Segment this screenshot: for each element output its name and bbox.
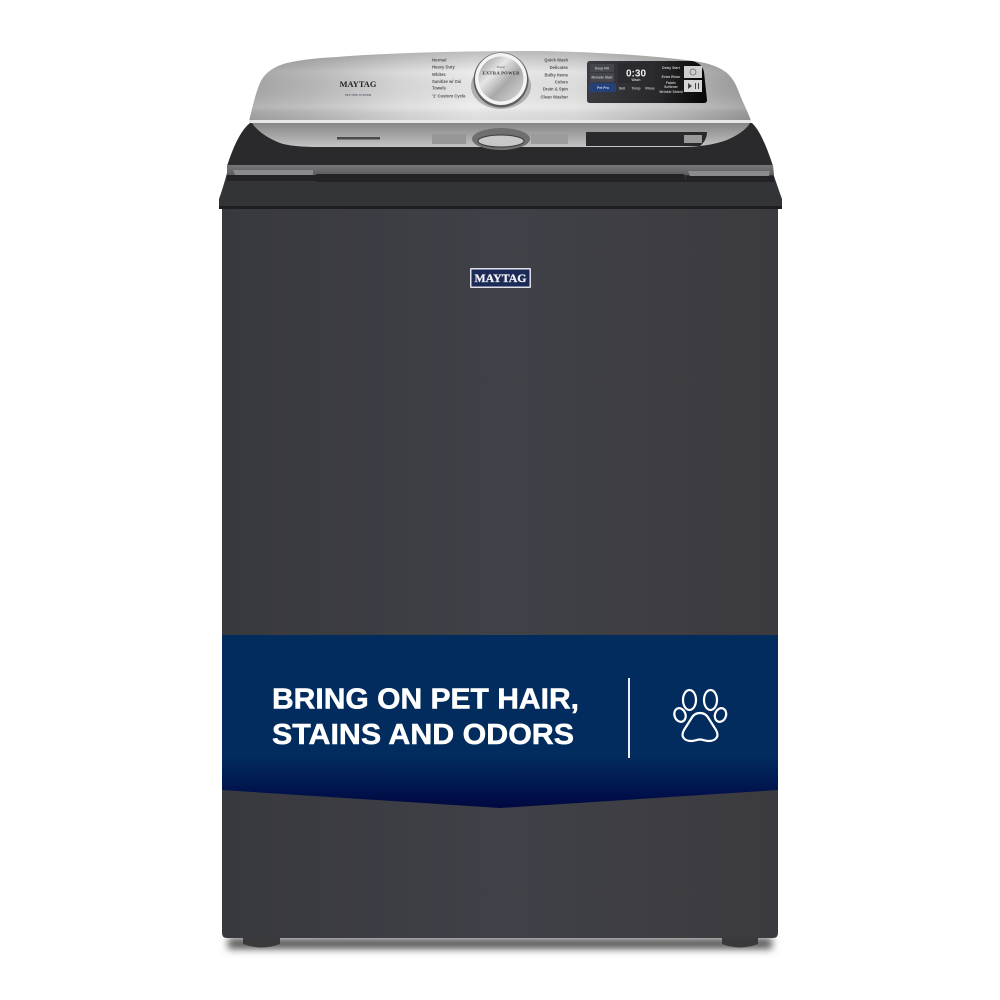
banner heading: STAINS AND ODORS: [272, 719, 574, 751]
display buttons left: Remote Start: [591, 76, 613, 80]
cycle labels right: [540, 58, 569, 100]
washer feet: [243, 936, 758, 948]
cycle labels right: Delicates: [550, 65, 569, 70]
cycle labels left: '1' Custom Cycle: [432, 94, 466, 98]
banner: [222, 635, 778, 808]
display buttons right: [659, 66, 683, 94]
time screen: [618, 63, 654, 83]
glass lid: [227, 123, 773, 166]
front Maytag badge: MAYTAG: [474, 273, 527, 285]
selector dial: Power: [497, 65, 505, 69]
lid reflection of console: [252, 123, 750, 150]
banner divider: [628, 678, 630, 758]
cycle labels left: Whites: [432, 72, 446, 77]
console brand mark: MAYTAG: [340, 80, 377, 89]
banner heading: BRING ON PET HAIR,: [272, 684, 579, 716]
wash settings: [619, 86, 655, 90]
cycle labels left: Sanitize w/ Oxi: [432, 79, 461, 84]
display buttons left: Deep Fill: [595, 66, 609, 70]
console brand mark: [340, 80, 377, 97]
cycle labels left: Towels: [432, 86, 447, 90]
wash settings: Rinse: [645, 86, 655, 90]
display buttons right: Extra Rinse: [662, 75, 680, 79]
display buttons right: Fabric: [666, 81, 676, 85]
cycle labels left: Normal: [432, 58, 446, 62]
control console: [249, 51, 751, 123]
washer top deck: [219, 173, 782, 209]
cycle labels right: Drain & Spin: [543, 86, 568, 92]
washer lower body: [222, 208, 778, 938]
cycle labels right: Bulky Items: [544, 72, 569, 78]
icon: paw print: [672, 690, 728, 741]
control display panel: [587, 61, 707, 103]
front Maytag badge: [470, 268, 531, 288]
cycle labels right: Clean Washer: [540, 94, 568, 100]
display buttons right: Wrinkle Shield: [659, 90, 683, 94]
display buttons right: Softener: [664, 85, 679, 89]
display buttons right: Delay Start: [662, 66, 681, 70]
cycle labels left: Heavy Duty: [432, 64, 455, 70]
cycle labels right: Quick Wash: [544, 58, 568, 62]
selector dial: [471, 52, 531, 109]
selector dial: EXTRA POWER: [482, 70, 520, 76]
wash settings: Soil: [619, 86, 625, 90]
wash settings: Temp: [632, 86, 640, 90]
display buttons left: [589, 64, 616, 92]
console brand mark: PET PRO SYSTEM: [345, 93, 372, 97]
power and start buttons: [684, 66, 702, 92]
time screen: 0:30: [626, 68, 646, 80]
cycle labels left: [432, 58, 466, 98]
time screen: Wash: [632, 78, 640, 82]
lid front strip and handle: [227, 165, 774, 182]
banner heading: [272, 684, 579, 751]
display buttons left: Pet Pro: [597, 86, 609, 90]
cycle labels right: Colors: [555, 80, 569, 84]
floor shadow: [228, 938, 772, 949]
